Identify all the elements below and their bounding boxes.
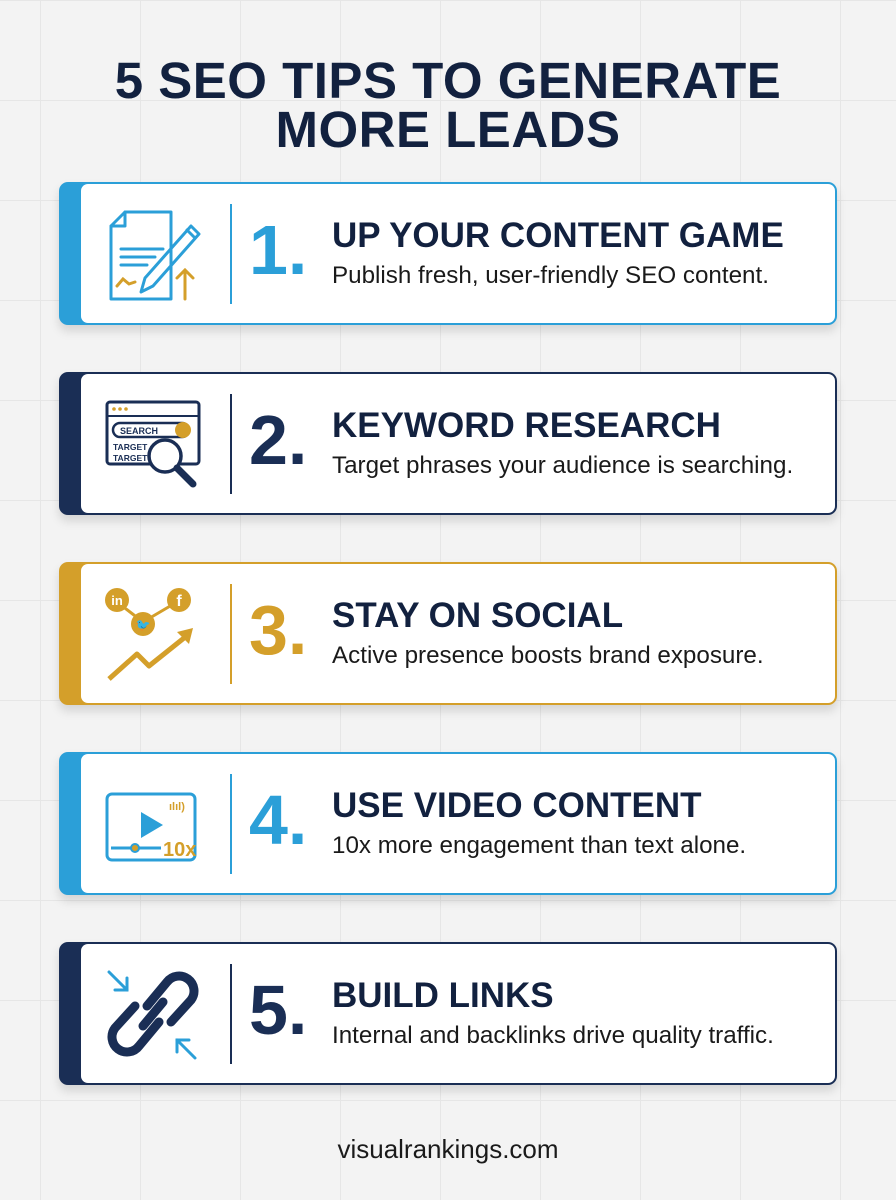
card 1: content (59, 182, 837, 325)
icon: search window: TARGET (113, 442, 148, 452)
heading: STAY ON SOCIAL (332, 596, 623, 635)
number 2: 2. (249, 401, 307, 479)
icon: social network growth: in (111, 593, 123, 608)
card 5: links (59, 942, 837, 1085)
card 4: video (59, 752, 837, 895)
icon: chain link (107, 970, 198, 1060)
number 3: 3. (249, 591, 307, 669)
card 2: keyword research (59, 372, 837, 515)
icon: search window (106, 400, 200, 488)
icon: social network growth: 🐦 (136, 618, 151, 632)
description: 10x more engagement than text alone. (332, 832, 746, 859)
icon: video player (106, 792, 196, 862)
heading: KEYWORD RESEARCH (332, 406, 721, 445)
heading: USE VIDEO CONTENT (332, 786, 701, 825)
heading: BUILD LINKS (332, 976, 554, 1015)
card 3: social (59, 562, 837, 705)
title: MORE LEADS (275, 101, 621, 158)
number 5: 5. (249, 971, 307, 1049)
description: Publish fresh, user-friendly SEO content. (332, 262, 769, 289)
description: Active presence boosts brand exposure. (332, 642, 764, 669)
icon: search window: SEARCH (120, 426, 158, 436)
icon: document with pen (110, 210, 201, 300)
number 4: 4. (249, 781, 307, 859)
icon: social network growth (105, 588, 193, 681)
footer: visualrankings.com (337, 1134, 559, 1164)
description: Target phrases your audience is searching. (332, 452, 793, 479)
title (115, 52, 781, 158)
number 1: 1. (249, 211, 307, 289)
heading: UP YOUR CONTENT GAME (332, 216, 784, 255)
title: 5 SEO TIPS TO GENERATE (115, 52, 781, 109)
icon: video player: ılıl) (169, 801, 185, 813)
icon: video player: 10x (163, 839, 196, 861)
icon: search window: TARGET (113, 453, 148, 463)
icon: social network growth: f (176, 593, 182, 610)
description: Internal and backlinks drive quality traffic. (332, 1022, 774, 1049)
